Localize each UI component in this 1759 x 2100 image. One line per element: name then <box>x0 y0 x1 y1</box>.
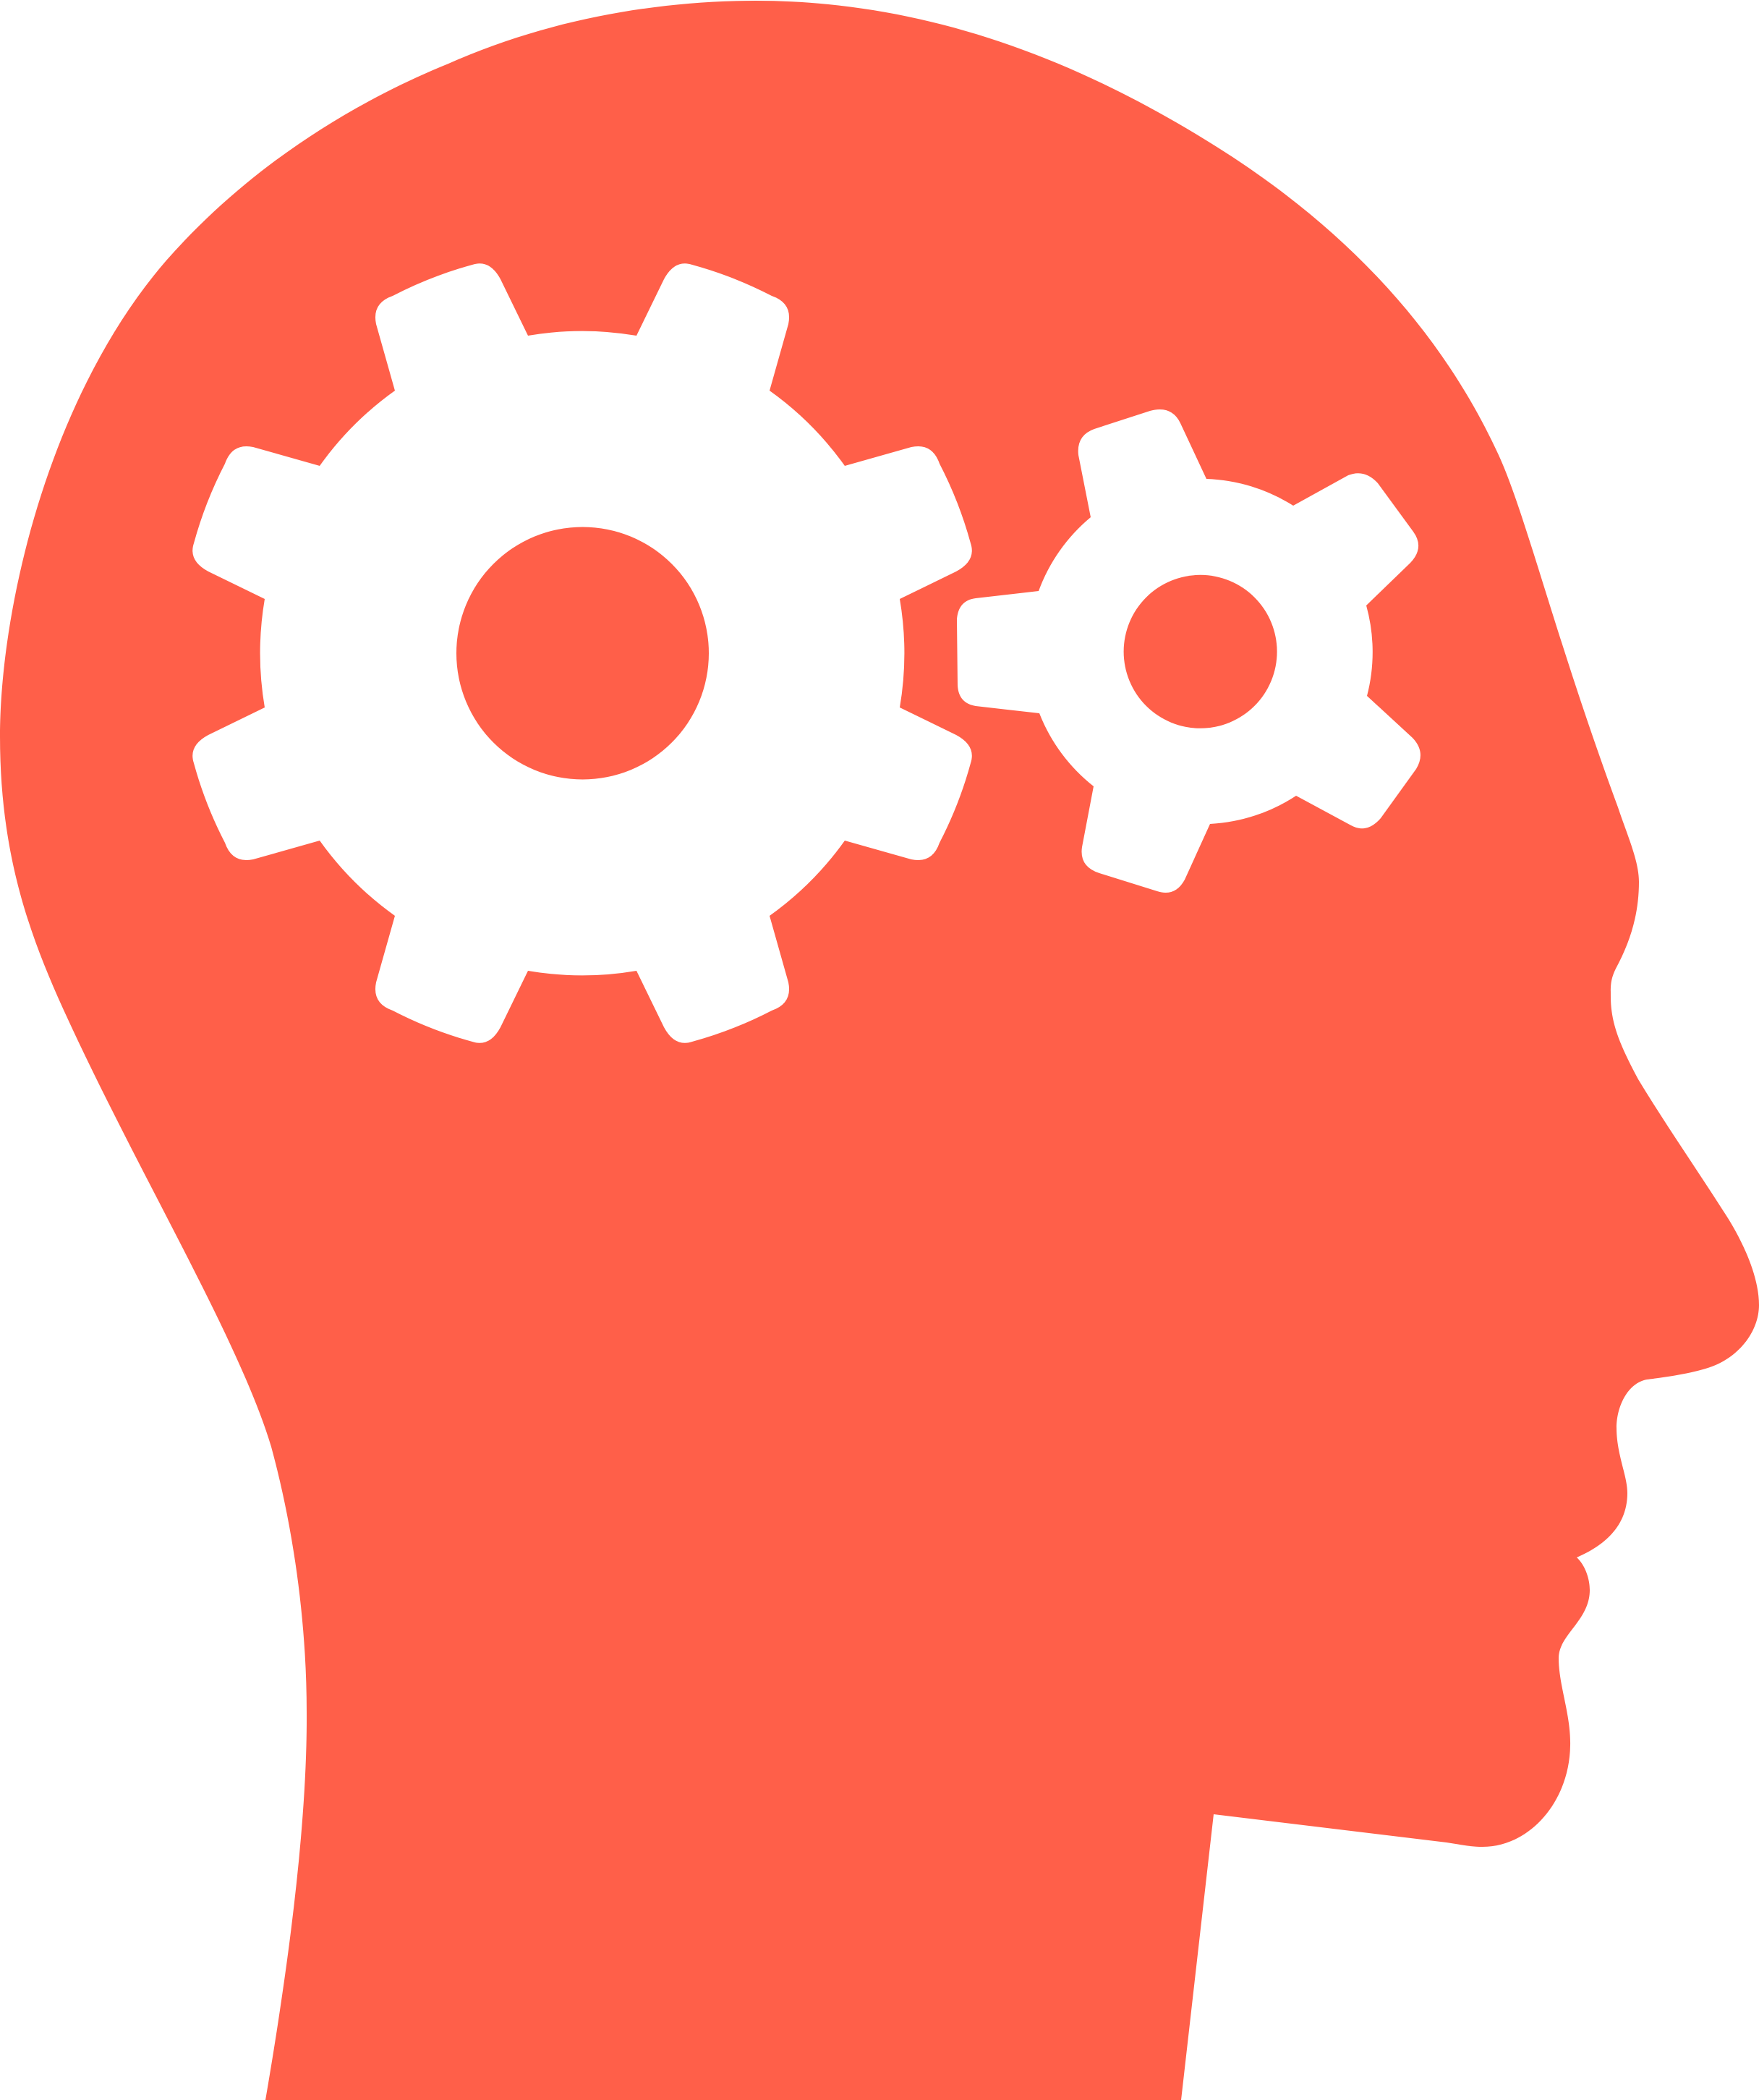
large gear <box>192 263 972 1043</box>
large gear hole <box>456 527 709 780</box>
small gear hole <box>1124 575 1277 728</box>
small gear <box>957 409 1421 893</box>
